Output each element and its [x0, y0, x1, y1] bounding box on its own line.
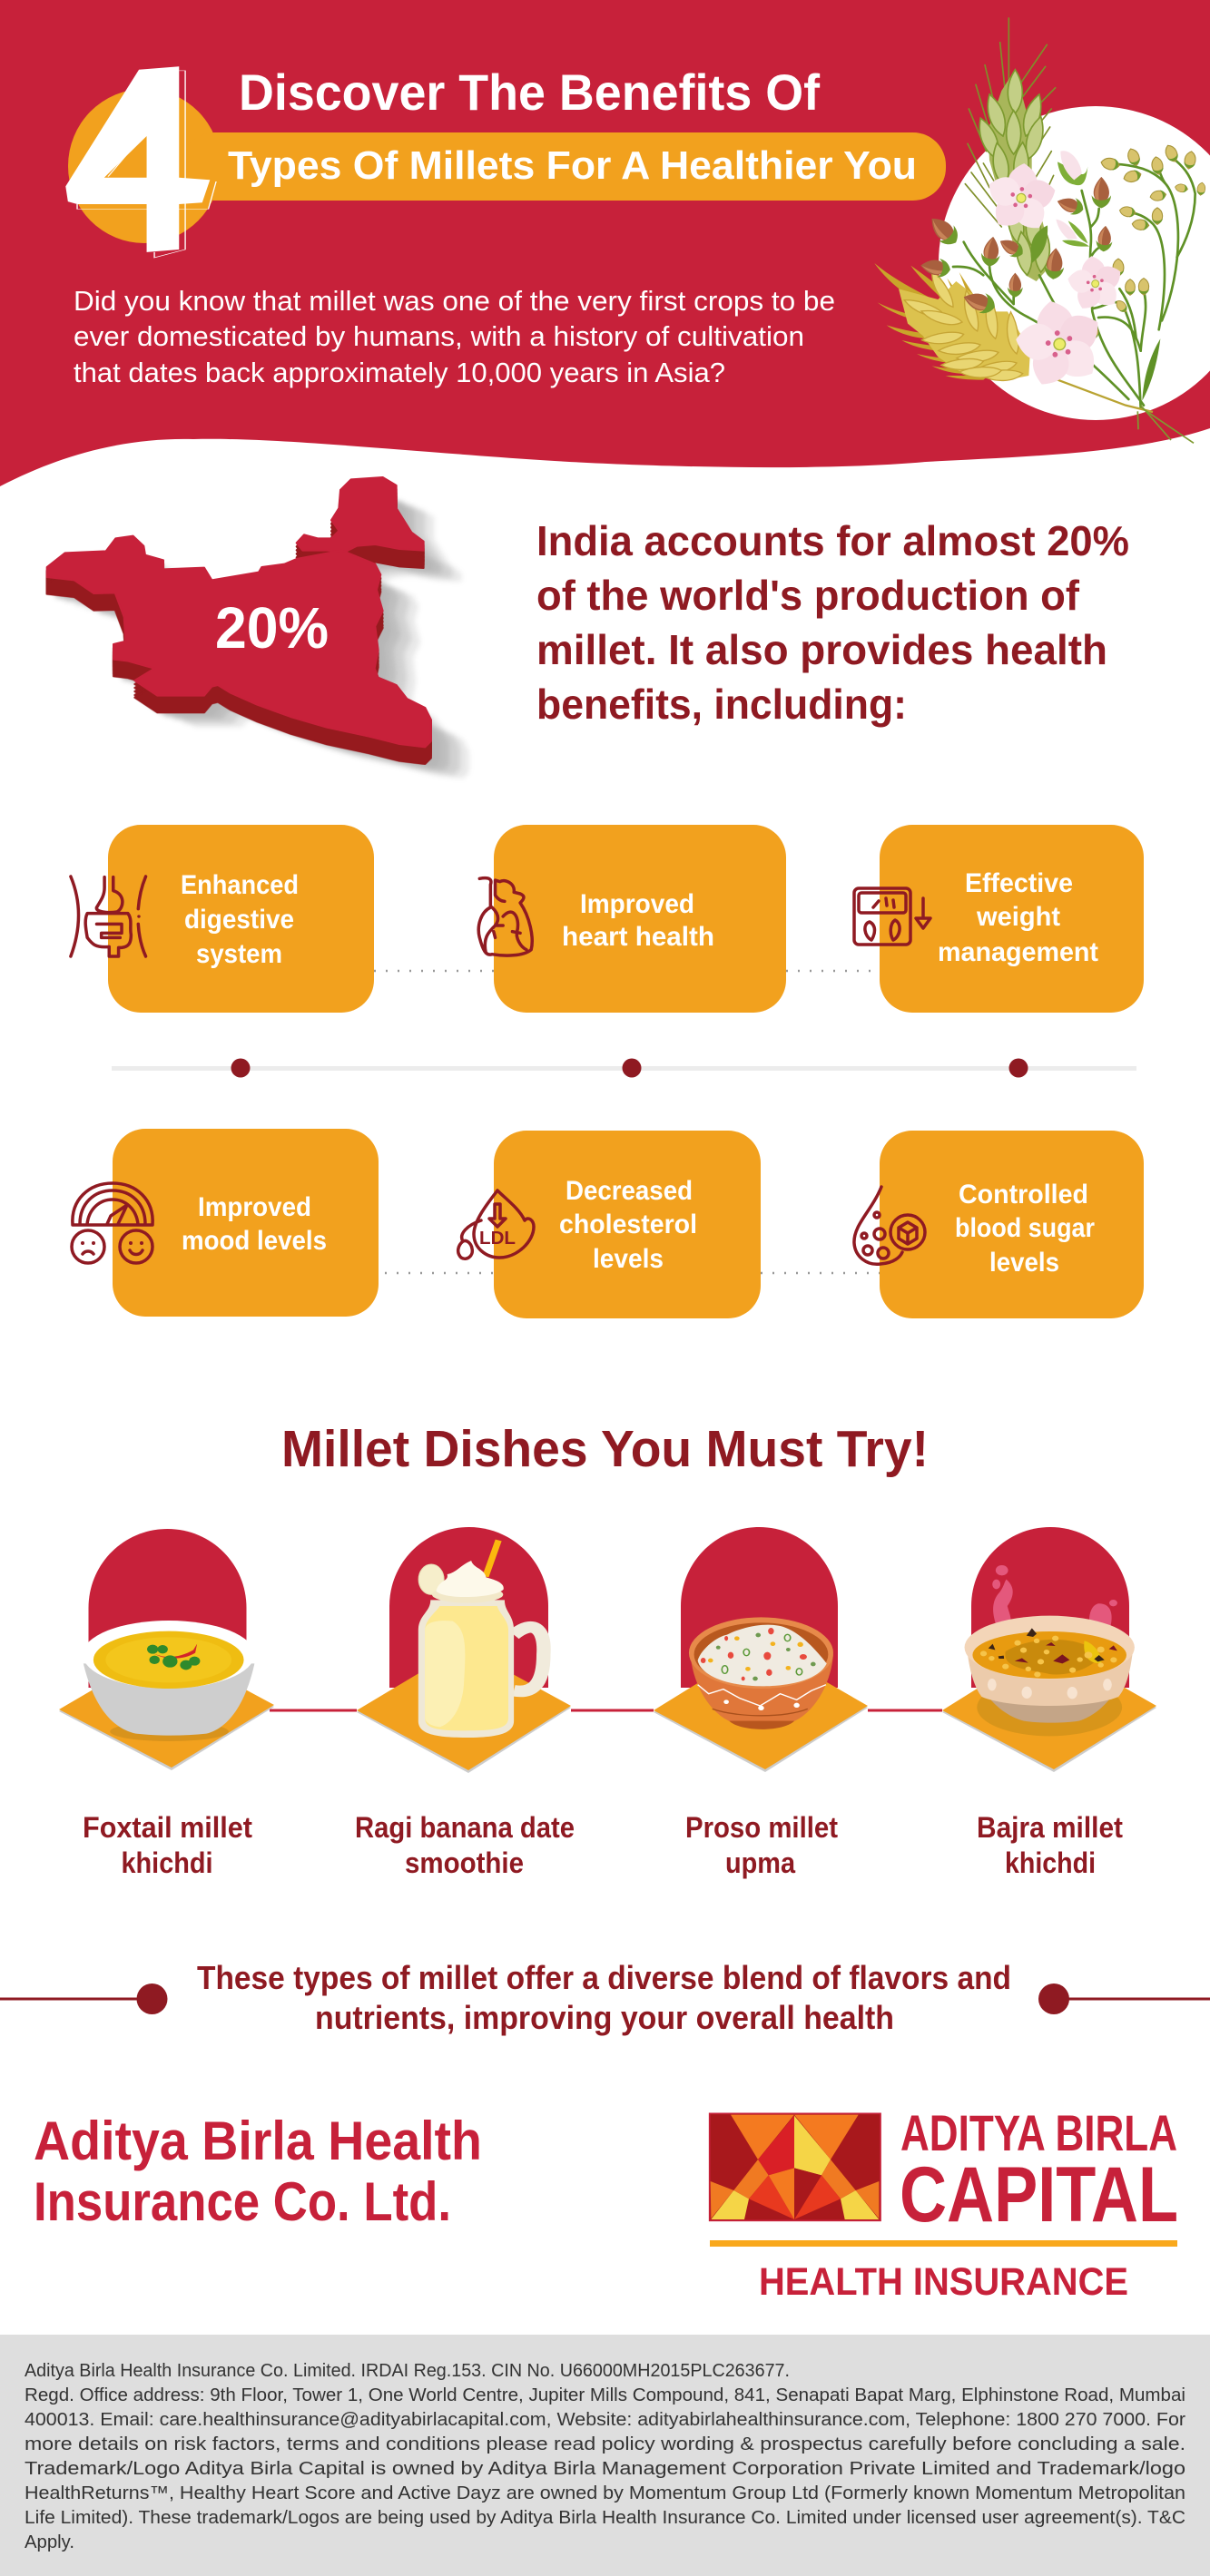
header white circle [939, 106, 1210, 420]
dish 3: proso millet upma [654, 1527, 868, 1879]
footer disclaimer: Apply. [25, 2532, 74, 2552]
buds [920, 143, 1206, 339]
footer disclaimer: HealthReturns™, Healthy Heart Score and Active Dayz are owned by Momentum Group Ltd (Formerly known Momentum Metropolitan [25, 2483, 1185, 2503]
label: upma [725, 1846, 795, 1879]
title line 2: Types Of Millets For A Healthier You [228, 143, 917, 188]
label: Bajra millet [977, 1811, 1123, 1844]
logo: Aditya Birla Capital: HEALTH INSURANCE [759, 2260, 1128, 2304]
company name: Insurance Co. Ltd. [34, 2171, 451, 2232]
closing statement with side connectors: nutrients, improving your overall health [315, 1999, 894, 2036]
title line 1: Discover The Benefits Of [239, 64, 820, 121]
flowers [980, 161, 1129, 399]
intro paragraph [74, 285, 835, 388]
logo: Aditya Birla Capital [710, 2104, 1178, 2304]
diamond [357, 1647, 571, 1773]
dish 4: bajra millet khichdi [942, 1527, 1156, 1879]
footer disclaimer: Regd. Office address: 9th Floor, Tower 1, One World Centre, Jupiter Mills Compound, 841, Senapati Bapat Marg, Elphinstone Road, Mumbai [25, 2385, 1185, 2405]
illustration: millet plant bouquet [874, 18, 1206, 443]
orange circle behind number [68, 89, 221, 243]
benefit: decreased cholesterol levels: levels [593, 1244, 664, 1274]
map: 3D red India shape [47, 477, 469, 779]
benefit: improved heart health: Improved [580, 889, 694, 919]
benefit: effective weight management: Effective [965, 868, 1073, 898]
label [83, 1811, 252, 1879]
icon: weighing scale [854, 888, 930, 945]
icon: intestine [71, 877, 146, 956]
benefit: decreased cholesterol levels: cholesterol [559, 1210, 697, 1239]
timeline with dots [112, 1058, 1136, 1078]
header: red wave background [0, 0, 1210, 486]
green millet spike [965, 18, 1056, 281]
benefit: enhanced digestive system: system [196, 939, 282, 969]
label: Ragi banana date [355, 1811, 575, 1844]
big number 4 [65, 66, 216, 258]
benefit: effective weight management [854, 825, 1144, 1013]
arch [681, 1527, 838, 1688]
dish 1: foxtail millet khichdi [59, 1529, 274, 1879]
heading: millet dishes: Millet Dishes You Must Try! [281, 1420, 929, 1478]
stems [953, 151, 1195, 443]
India production statement: India accounts for almost 20% [536, 517, 1129, 564]
India map with 20% [47, 477, 469, 779]
benefit: enhanced digestive system: Enhanced [181, 870, 299, 900]
orange title pill [182, 132, 946, 201]
icon: LDL [458, 1190, 534, 1259]
benefit: improved heart health [478, 825, 786, 1013]
footer disclaimer: more details on risk factors, terms and conditions please read policy wording & prospectus carefully before concluding a sale. [25, 2434, 1185, 2454]
label: smoothie [405, 1846, 524, 1879]
India production statement: millet. It also provides health [536, 626, 1107, 673]
icon: mood gauge [72, 1183, 152, 1263]
label: Proso millet [685, 1811, 838, 1844]
company name [34, 2111, 482, 2232]
bowl of upma [689, 1617, 833, 1729]
icon: heart [478, 878, 532, 955]
label: khichdi [1005, 1846, 1096, 1879]
intro paragraph: that dates back approximately 10,000 years in Asia? [74, 357, 725, 388]
closing statement with side connectors [0, 1959, 1210, 2036]
benefit: effective weight management: management [938, 937, 1098, 967]
footer disclaimer: Life Limited). These trademark/Logos are being used by Aditya Birla Health Insurance Co. Limited under licensed user agreement(s). T&C [25, 2507, 1185, 2528]
footer disclaimer: Trademark/Logo Aditya Birla Capital is owned by Aditya Birla Management Corporation Private Limited and Trademark/logo [25, 2458, 1185, 2479]
diamond [654, 1644, 868, 1772]
benefit: improved mood levels: Improved [198, 1192, 311, 1222]
label [977, 1811, 1123, 1879]
benefit: controlled blood sugar levels: Controlled [959, 1180, 1088, 1210]
benefit: improved mood levels [72, 1129, 379, 1317]
arch [89, 1529, 247, 1688]
label [685, 1811, 838, 1879]
label [355, 1811, 575, 1879]
arch [389, 1527, 548, 1688]
footer disclaimer: Aditya Birla Health Insurance Co. Limited. IRDAI Reg.153. CIN No. U66000MH2015PLC263677. [25, 2360, 790, 2381]
diamond [942, 1644, 1156, 1772]
benefit: decreased cholesterol levels: Decreased [566, 1176, 693, 1206]
benefit: controlled blood sugar levels [854, 1131, 1144, 1318]
benefit: decreased cholesterol levels [458, 1131, 761, 1318]
intro paragraph: ever domesticated by humans, with a history of cultivation [74, 320, 804, 352]
icon: LDL: LDL [479, 1229, 516, 1249]
closing statement with side connectors: These types of millet offer a diverse blend of flavors and [197, 1959, 1011, 1996]
20% label: 20% [215, 595, 329, 661]
wheat ear [874, 263, 1030, 381]
bowl with steam [965, 1565, 1135, 1736]
company name: Aditya Birla Health [34, 2111, 482, 2171]
smoothie jar [418, 1540, 544, 1738]
diamond [59, 1647, 274, 1770]
benefit: effective weight management: weight [976, 902, 1060, 932]
benefit: controlled blood sugar levels: blood sugar [955, 1213, 1095, 1243]
benefit: improved heart health: heart health [562, 922, 714, 952]
benefit: improved mood levels: mood levels [182, 1226, 327, 1256]
label: khichdi [122, 1846, 212, 1879]
benefit: enhanced digestive system [71, 825, 374, 1013]
benefit: enhanced digestive system: digestive [184, 905, 294, 935]
label: Foxtail millet [83, 1811, 252, 1844]
India production statement: of the world's production of [536, 572, 1080, 619]
India production statement: benefits, including: [536, 681, 907, 728]
benefit: controlled blood sugar levels: levels [989, 1248, 1059, 1278]
intro paragraph: Did you know that millet was one of the very first crops to be [74, 285, 835, 317]
icon: blood drop with sugar [854, 1187, 925, 1264]
dish 2: ragi banana date smoothie [355, 1527, 575, 1879]
footer disclaimer: 400013. Email: care.healthinsurance@adityabirlacapital.com, Website: adityabirlahealthinsurance.com, Telephone: 1800 270 7000. For [25, 2409, 1185, 2430]
bowl [83, 1621, 254, 1741]
logo mark [710, 2113, 880, 2220]
footer disclaimer [0, 2335, 1210, 2576]
arch [971, 1527, 1129, 1688]
India production statement [536, 517, 1129, 728]
